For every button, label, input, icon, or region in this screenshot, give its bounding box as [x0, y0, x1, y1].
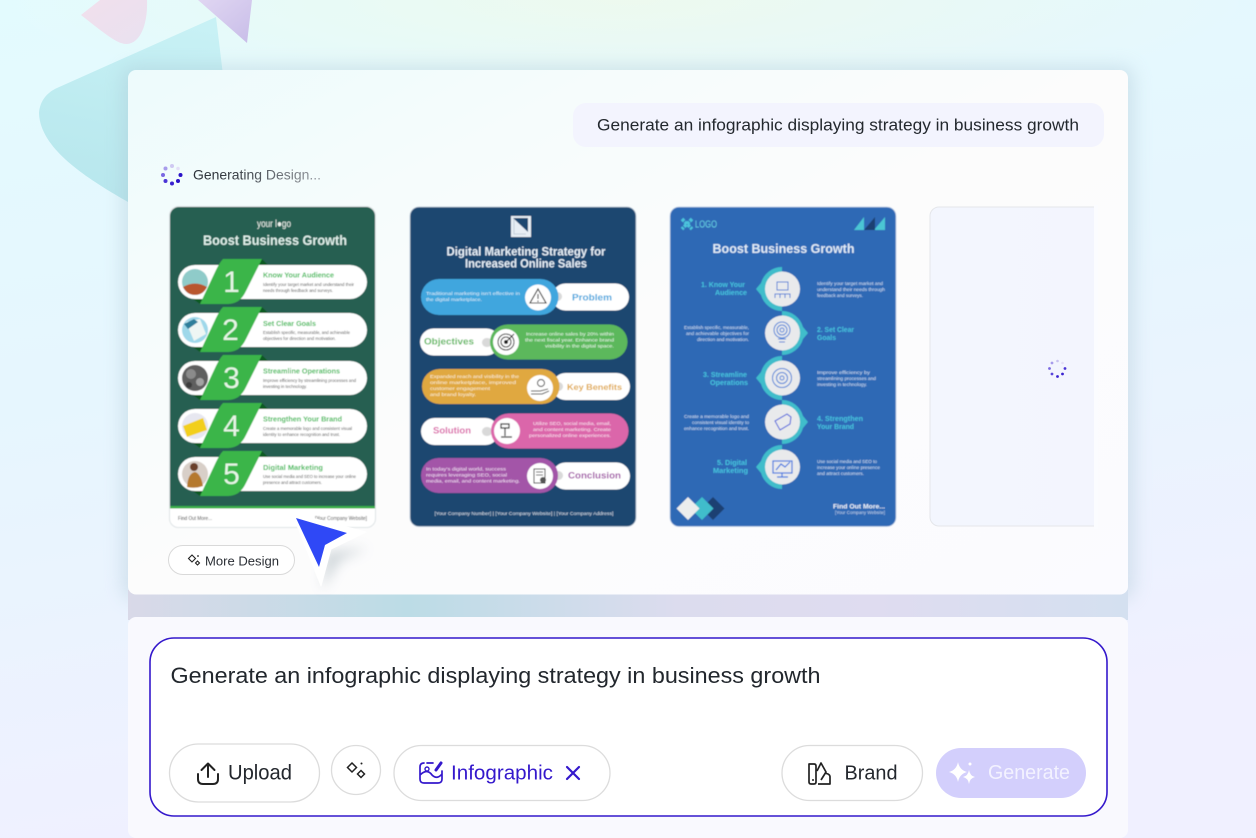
row: solution: Solution: [433, 426, 471, 436]
card 1: green infographic: [Your Company Website]: [315, 516, 368, 522]
step 1: 1: [223, 266, 240, 299]
corner triangles: [854, 217, 885, 230]
timeline rings: [756, 267, 808, 489]
step 3: [178, 355, 367, 400]
row: conclusion: In today's digital world, success: [426, 466, 507, 472]
card 4: loading placeholder: [930, 205, 1098, 529]
step 2: Establish specific, measurable, and achievable: [263, 330, 350, 335]
row: objectives: the next fiscal year. Enhance brand: [525, 338, 614, 344]
card 2: navy infographic: [410, 207, 636, 526]
descriptions left: consistent visual identity to: [692, 420, 750, 425]
row: solution: [421, 414, 628, 448]
labels right: 4. Strengthen: [817, 414, 863, 423]
descriptions right: investing in technology.: [817, 382, 867, 387]
prompt text: Generate an infographic displaying strategy in business growth: [170, 663, 820, 688]
card 2: navy infographic: Increased Online Sales: [465, 258, 587, 270]
descriptions left: and achievable objectives for: [686, 331, 750, 336]
decorative shape: pink: [81, 0, 147, 44]
row: problem: Problem: [572, 292, 612, 304]
sparkle button: [332, 746, 380, 794]
logo: [511, 216, 531, 237]
step 5: [178, 451, 367, 496]
logo: LOGO: [695, 220, 717, 230]
logo: [682, 219, 717, 230]
row: conclusion: [421, 458, 630, 493]
infographic chip: [394, 746, 610, 800]
step 5: presence and attract customers.: [263, 480, 322, 485]
panel shadow: [122, 66, 1134, 600]
descriptions left: [684, 325, 750, 431]
row: solution: personalized online experiences.: [529, 433, 611, 439]
panel: generated designs: [128, 70, 1128, 594]
step 4: [178, 403, 367, 448]
labels right: 2. Set Clear: [817, 325, 854, 334]
descriptions left: Establish specific, measurable,: [684, 325, 749, 330]
status text: Generating Design...: [193, 166, 321, 182]
step 4: identity to enhance recognition and trust.: [263, 432, 340, 437]
step 4: 4: [223, 410, 240, 443]
step 3: Improve efficiency by streamlining processes and: [263, 378, 356, 383]
step 1: Know Your Audience: [263, 270, 334, 280]
decorative shape: purple: [198, 0, 252, 43]
card 1: green infographic: [170, 206, 376, 528]
icon: monitor: [773, 461, 792, 477]
loading spinner: [161, 164, 182, 186]
labels left: 5. Digital: [717, 458, 747, 467]
brand button: Brand: [844, 762, 898, 784]
step 3: Streamline Operations: [263, 366, 340, 376]
descriptions left: enhance recognition and trust.: [684, 426, 749, 431]
icon: tag: [775, 414, 791, 430]
labels left: Operations: [710, 378, 748, 387]
footer: Find Out More...: [833, 504, 885, 510]
title: Boost Business Growth: [203, 233, 347, 248]
row: objectives: visibility in the digital space.: [545, 344, 614, 350]
decorative shape: teal: [39, 17, 240, 230]
row: problem: the digital marketplace.: [426, 297, 482, 303]
descriptions right: Improve efficiency by: [817, 370, 871, 375]
band between panels: [128, 590, 1128, 620]
descriptions right: increase your online presence: [817, 465, 881, 470]
row: key benefits: [422, 369, 630, 404]
descriptions right: Use social media and SEO to: [817, 459, 878, 464]
labels left: Audience: [715, 288, 747, 297]
step 3: 3: [223, 362, 240, 395]
row: solution: and content marketing. Create: [533, 427, 611, 433]
infographic chip: Infographic: [451, 762, 553, 784]
row: key benefits: and brand loyalty.: [430, 392, 476, 398]
row: key benefits: online marketplace, improved: [430, 380, 516, 386]
footer: [Your Company Number] | [Your Company Website] | [Your Company Address]: [434, 511, 614, 517]
descriptions right: and attract customers.: [817, 471, 864, 476]
row: key benefits: Expanded reach and visibility in the: [430, 374, 519, 380]
icon: audience: [775, 282, 790, 298]
row: objectives: [420, 324, 628, 360]
labels right: Goals: [817, 333, 836, 342]
row: key benefits: Key Benefits: [567, 382, 622, 392]
row: key benefits: customer engagement: [430, 386, 491, 392]
row: conclusion: media, email, and content marketing.: [426, 478, 520, 484]
descriptions right: feedback and surveys.: [817, 293, 863, 298]
title: Boost Business Growth: [712, 241, 855, 256]
cursor arrow: [292, 513, 368, 590]
row: problem: Traditional marketing isn't effective in: [426, 291, 520, 297]
step 1: [178, 259, 367, 304]
step 2: Set Clear Goals: [263, 319, 316, 328]
descriptions left: Create a memorable logo and: [684, 414, 750, 419]
row: conclusion: Conclusion: [568, 470, 621, 482]
step 5: Use social media and SEO to increase your online: [263, 474, 356, 479]
labels left: Marketing: [713, 466, 748, 475]
step 1: needs through feedback and surveys.: [263, 288, 333, 293]
brand button: [782, 746, 922, 800]
prompt bubble: [573, 103, 1104, 147]
labels left: 3. Streamline: [703, 370, 747, 379]
logo: your l●go: [257, 219, 291, 230]
more design button: [168, 546, 294, 574]
diamonds: [676, 497, 724, 520]
prompt bubble: Generate an infographic displaying strategy in business growth: [597, 116, 1079, 134]
row: solution: Utilize SEO, social media, email,: [533, 421, 611, 427]
step 3: investing in technology.: [263, 384, 307, 389]
more design button: More Design: [205, 554, 279, 568]
row: conclusion: requires leveraging SEO, social: [426, 472, 507, 478]
step 5: Digital Marketing: [263, 463, 323, 472]
step 4: Create a memorable logo and consistent visual: [263, 426, 352, 431]
generate button: Generate: [988, 762, 1070, 784]
step 2: [178, 307, 367, 352]
generate button: [936, 748, 1086, 798]
icon: gear target: [772, 368, 792, 388]
row: objectives: Increase online sales by 20% within: [526, 332, 614, 338]
descriptions right: streamlining processes and: [817, 376, 877, 381]
footer: Find Out More...: [178, 516, 212, 522]
labels right: [817, 325, 863, 431]
upload button: [170, 744, 320, 802]
upload button: Upload: [228, 762, 292, 784]
icon: target bulb: [774, 322, 790, 342]
row: problem: [421, 279, 629, 315]
labels left: [701, 280, 748, 475]
step 5: 5: [223, 458, 240, 491]
step 2: 2: [222, 314, 239, 347]
descriptions right: understand their needs through: [817, 287, 886, 292]
loading spinner: [1048, 360, 1066, 378]
step 2: objectives for direction and motivation.: [263, 336, 336, 341]
step 1: Identify your target market and understand their: [263, 282, 354, 287]
labels left: 1. Know Your: [701, 280, 745, 289]
title: Digital Marketing Strategy for: [446, 246, 606, 258]
descriptions left: direction and motivation.: [697, 337, 749, 342]
card 3: blue infographic: [Your Company Website]: [835, 510, 885, 515]
card 3: blue infographic: [670, 207, 896, 526]
descriptions right: Identify your target market and: [817, 281, 884, 286]
input box: [150, 638, 1107, 816]
row: objectives: Objectives: [424, 336, 474, 348]
labels right: Your Brand: [817, 422, 854, 431]
step 4: Strengthen Your Brand: [263, 414, 342, 424]
panel: prompt input: [128, 617, 1128, 838]
descriptions right: [817, 281, 886, 476]
